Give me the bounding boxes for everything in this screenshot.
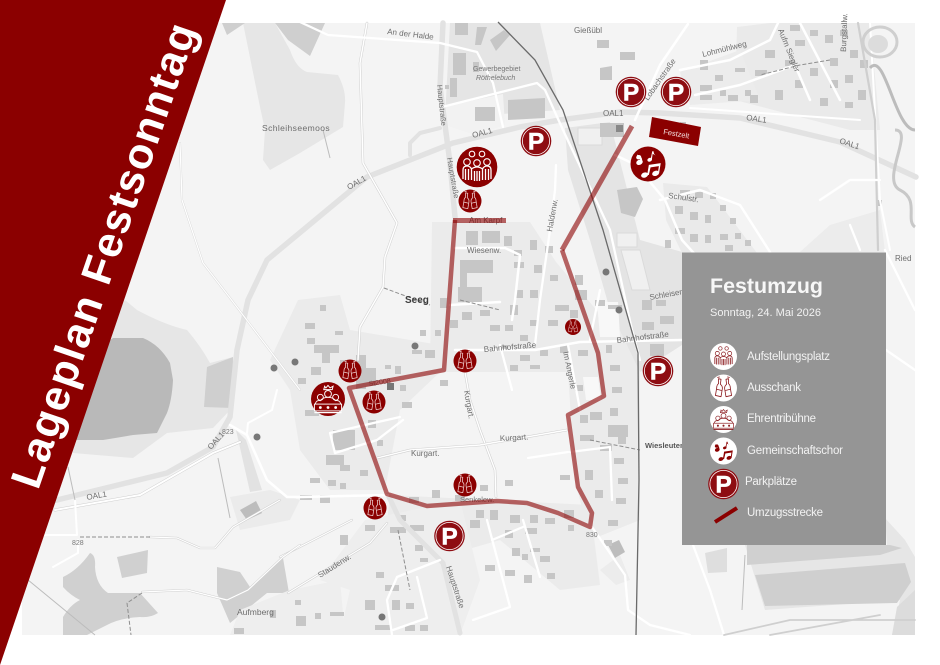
map: labels: 830 — [586, 532, 598, 539]
legend item: assembly area — [710, 343, 830, 370]
icon: drinks small — [565, 319, 581, 335]
map: labels: Gießübl — [574, 26, 602, 35]
icon: choir — [630, 146, 666, 182]
map: labels: Hauptstraße — [445, 157, 461, 199]
map: labels: Bahnhofstraße — [616, 330, 670, 345]
map: labels: Röthelebuch — [476, 75, 515, 82]
map: labels: Schleiserw. — [649, 286, 690, 302]
map: labels: Kurgart. — [411, 449, 439, 458]
map: labels: OAL1 — [746, 113, 768, 125]
map: labels: OAL1 — [346, 173, 368, 192]
railway line — [498, 22, 639, 635]
legend item: drinks — [710, 374, 801, 402]
map: labels: Seeg — [405, 295, 429, 306]
map: labels: Gewerbegebiet — [473, 66, 521, 73]
legend item: assembly area: Aufstellungsplatz — [747, 351, 830, 363]
map: labels: 823 — [222, 429, 234, 436]
festival tent: Festzelt — [663, 127, 691, 141]
icon: parking top right — [661, 77, 691, 107]
legend item: parking: Parkplätze — [745, 476, 797, 488]
legend item: choir — [710, 438, 843, 464]
map: labels: OAL1 — [603, 109, 624, 118]
icon: drinks south — [454, 474, 476, 496]
map: labels: Lohmühlweg — [701, 39, 748, 59]
map: labels: Senkelew. — [460, 495, 494, 504]
icon: drinks north — [458, 190, 482, 212]
map: labels: Am Karpf — [469, 216, 503, 225]
legend date: Sonntag, 24. Mai 2026 — [710, 307, 821, 319]
icon: parking east — [643, 356, 673, 386]
map: labels: OAL1 — [86, 489, 108, 502]
map: labels: Hauptstraße — [435, 84, 448, 126]
icon: parking centre north — [521, 126, 551, 156]
icon: parking top left — [616, 77, 646, 107]
legend item: route — [715, 507, 823, 522]
map: labels: Bahnhofstraße — [483, 340, 537, 354]
festival tent — [649, 117, 701, 146]
map: labels: OAL1 — [471, 126, 494, 140]
map: labels: OAL1 — [206, 430, 227, 451]
map: labels: Aufmberg — [237, 607, 274, 617]
title banner — [0, 0, 226, 665]
map: buildings — [234, 23, 882, 634]
icon: drinks west upper — [338, 360, 362, 382]
map: labels: Aufm Siegler — [776, 27, 802, 74]
legend item: choir: Gemeinschaftschor — [747, 445, 843, 457]
legend item: route: Umzugsstrecke — [747, 507, 823, 519]
icon: drinks centre — [454, 350, 476, 372]
map: labels: Burgstallw. — [839, 13, 849, 52]
title: Lageplan Festsonntag — [2, 17, 206, 494]
map: labels: Im Angerle — [561, 351, 578, 390]
map: labels: Lobachstraße — [642, 56, 678, 102]
map: labels: Kurgart. — [462, 390, 476, 419]
map: labels: Wiesenw. — [467, 246, 501, 255]
legend heading: Festumzug — [710, 275, 823, 298]
map: labels: An der Halde — [387, 27, 435, 42]
legend item: stage: Ehrentribühne — [747, 413, 816, 425]
map: labels: Ried — [895, 254, 911, 263]
map: labels: Hauptstraße — [444, 565, 466, 610]
panel: legend — [682, 252, 886, 545]
map: labels: Schleihseemoos — [262, 123, 330, 133]
legend item: drinks: Ausschank — [747, 382, 801, 394]
icon: stage — [311, 382, 345, 416]
legend item: parking — [708, 469, 797, 499]
map: labels: OAL1 — [838, 136, 861, 151]
map: labels: St2008 — [368, 378, 391, 388]
map: labels: 828 — [72, 540, 84, 547]
map: labels: Haldenw. — [545, 198, 560, 232]
icon: assembly area — [457, 147, 497, 187]
icon: drinks west lower — [362, 390, 386, 414]
icon: parking south — [434, 521, 465, 551]
icon: drinks southwest — [364, 496, 386, 520]
map: labels: Staudenw. — [316, 552, 353, 580]
map: labels: Schulstr. — [668, 191, 699, 204]
legend item: stage — [710, 406, 816, 433]
map: labels: Wiesleuten — [645, 441, 685, 450]
map: labels: Kurgart. — [500, 433, 529, 443]
parade route — [349, 126, 632, 527]
